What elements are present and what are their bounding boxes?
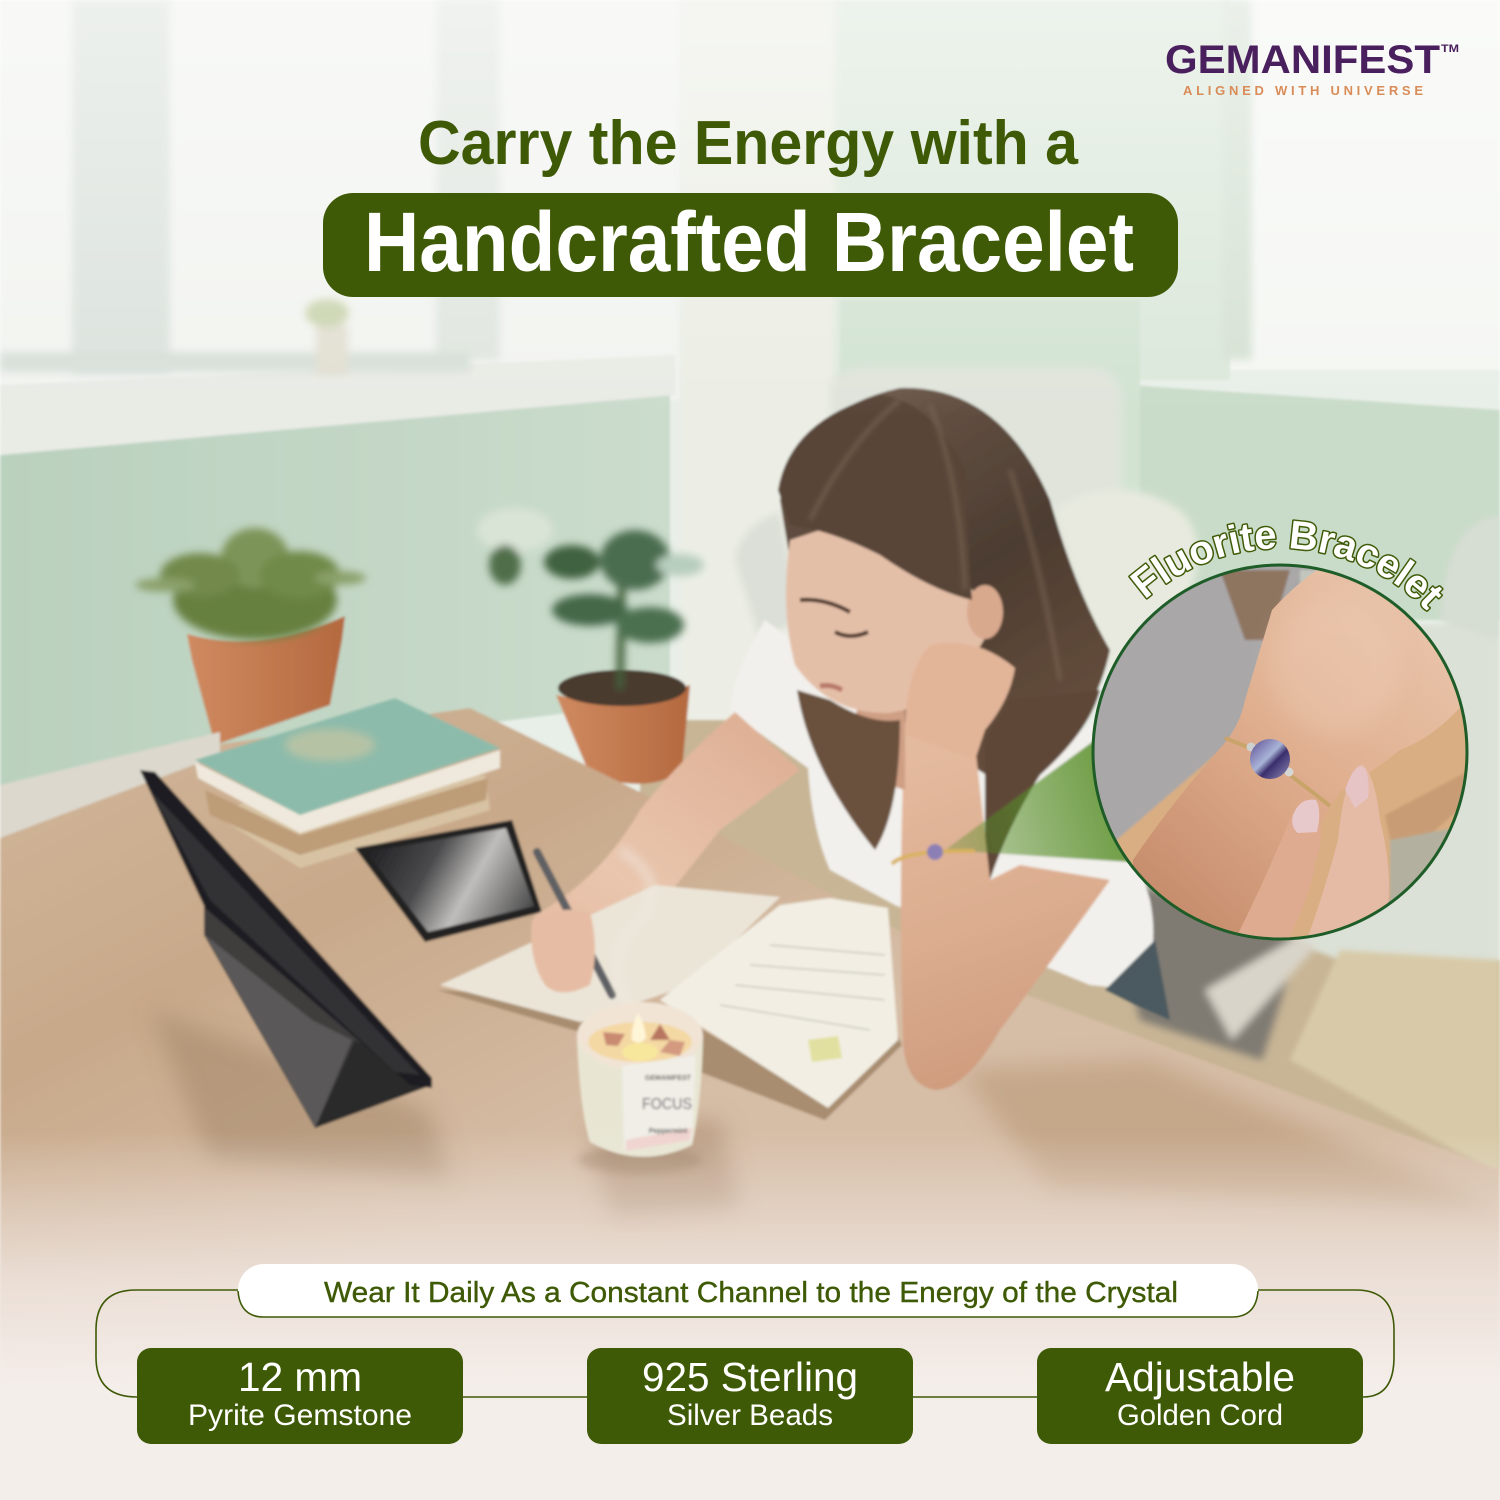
hair front	[778, 395, 972, 600]
feature box: silver beads: Silver Beads	[667, 1399, 833, 1432]
front strand	[797, 690, 900, 850]
connector lines	[96, 1290, 1394, 1397]
candle	[577, 1002, 703, 1174]
feature box: gemstone: Pyrite Gemstone	[188, 1399, 412, 1432]
tagline banner: Wear It Daily As a Constant Channel to the Energy of the Crystal	[324, 1277, 1178, 1309]
top light wash	[0, 0, 1500, 420]
potted plant centre	[477, 508, 704, 784]
candle label text	[642, 1075, 692, 1135]
candle label text: Peppermint	[649, 1128, 688, 1135]
inset background	[1090, 560, 1480, 945]
heading pill: Handcrafted Bracelet	[364, 195, 1134, 289]
inset bracelet	[1225, 738, 1330, 806]
notebook	[437, 885, 902, 1120]
heading line: Carry the Energy with a	[418, 109, 1078, 178]
face	[786, 520, 995, 713]
chair behind the woman	[735, 368, 1315, 1060]
feature box: golden cord: Adjustable	[1105, 1354, 1295, 1400]
logo: GEMANIFEST	[1165, 38, 1440, 82]
right sofa	[1180, 515, 1500, 1175]
shirt	[730, 620, 1153, 990]
feature box: silver beads: 925 Sterling	[642, 1354, 858, 1400]
hair back	[780, 388, 1110, 895]
inset hand highlight	[1276, 611, 1384, 730]
bracelet on wrist	[892, 740, 1130, 864]
logo: TM	[1441, 43, 1459, 55]
ear	[967, 585, 1003, 639]
feature box: gemstone	[137, 1348, 463, 1444]
woman	[533, 388, 1170, 1090]
writing arm	[533, 712, 800, 992]
hair highlights	[810, 400, 1060, 680]
black tablet on stand	[140, 770, 432, 1128]
dark jeans	[1105, 940, 1170, 1020]
curtain	[680, 0, 835, 740]
candle smoke	[617, 850, 651, 1010]
logo: ALIGNED WITH UNIVERSE	[1183, 83, 1423, 98]
bottom white fade	[0, 1130, 1500, 1500]
inset ring	[1093, 565, 1467, 939]
window frames	[0, 0, 1252, 375]
stack of books	[195, 698, 500, 868]
neck	[840, 700, 905, 790]
inset second hand fingers	[1235, 764, 1389, 945]
hand and pen	[531, 852, 612, 995]
potted plant left	[135, 528, 366, 745]
feature box: silver beads	[587, 1348, 913, 1444]
hair over the shoulder	[985, 690, 1100, 895]
logo	[1165, 38, 1459, 98]
hand on cheek	[905, 643, 1015, 760]
feature box: gemstone: 12 mm	[238, 1354, 362, 1400]
inset arm	[1130, 570, 1475, 940]
feature box: golden cord: Golden Cord	[1117, 1399, 1283, 1432]
wall ledge	[0, 732, 220, 838]
resting arm	[901, 730, 1110, 1090]
desk	[0, 708, 1500, 1500]
window-sill plant	[305, 299, 349, 375]
small tablet on desk	[355, 820, 542, 942]
candle label text: GEMANIFEST	[645, 1075, 692, 1082]
curved caption: Fluorite Bracelet	[1128, 519, 1444, 612]
tagline banner	[238, 1264, 1258, 1317]
inset photo: wrist with fluorite bracelet	[1092, 519, 1468, 940]
feature box: golden cord	[1037, 1348, 1363, 1444]
eye and brow	[800, 600, 868, 636]
floor behind desk	[640, 720, 1500, 1180]
candle label text: FOCUS	[642, 1096, 692, 1113]
desk wood shading	[150, 1010, 1500, 1220]
